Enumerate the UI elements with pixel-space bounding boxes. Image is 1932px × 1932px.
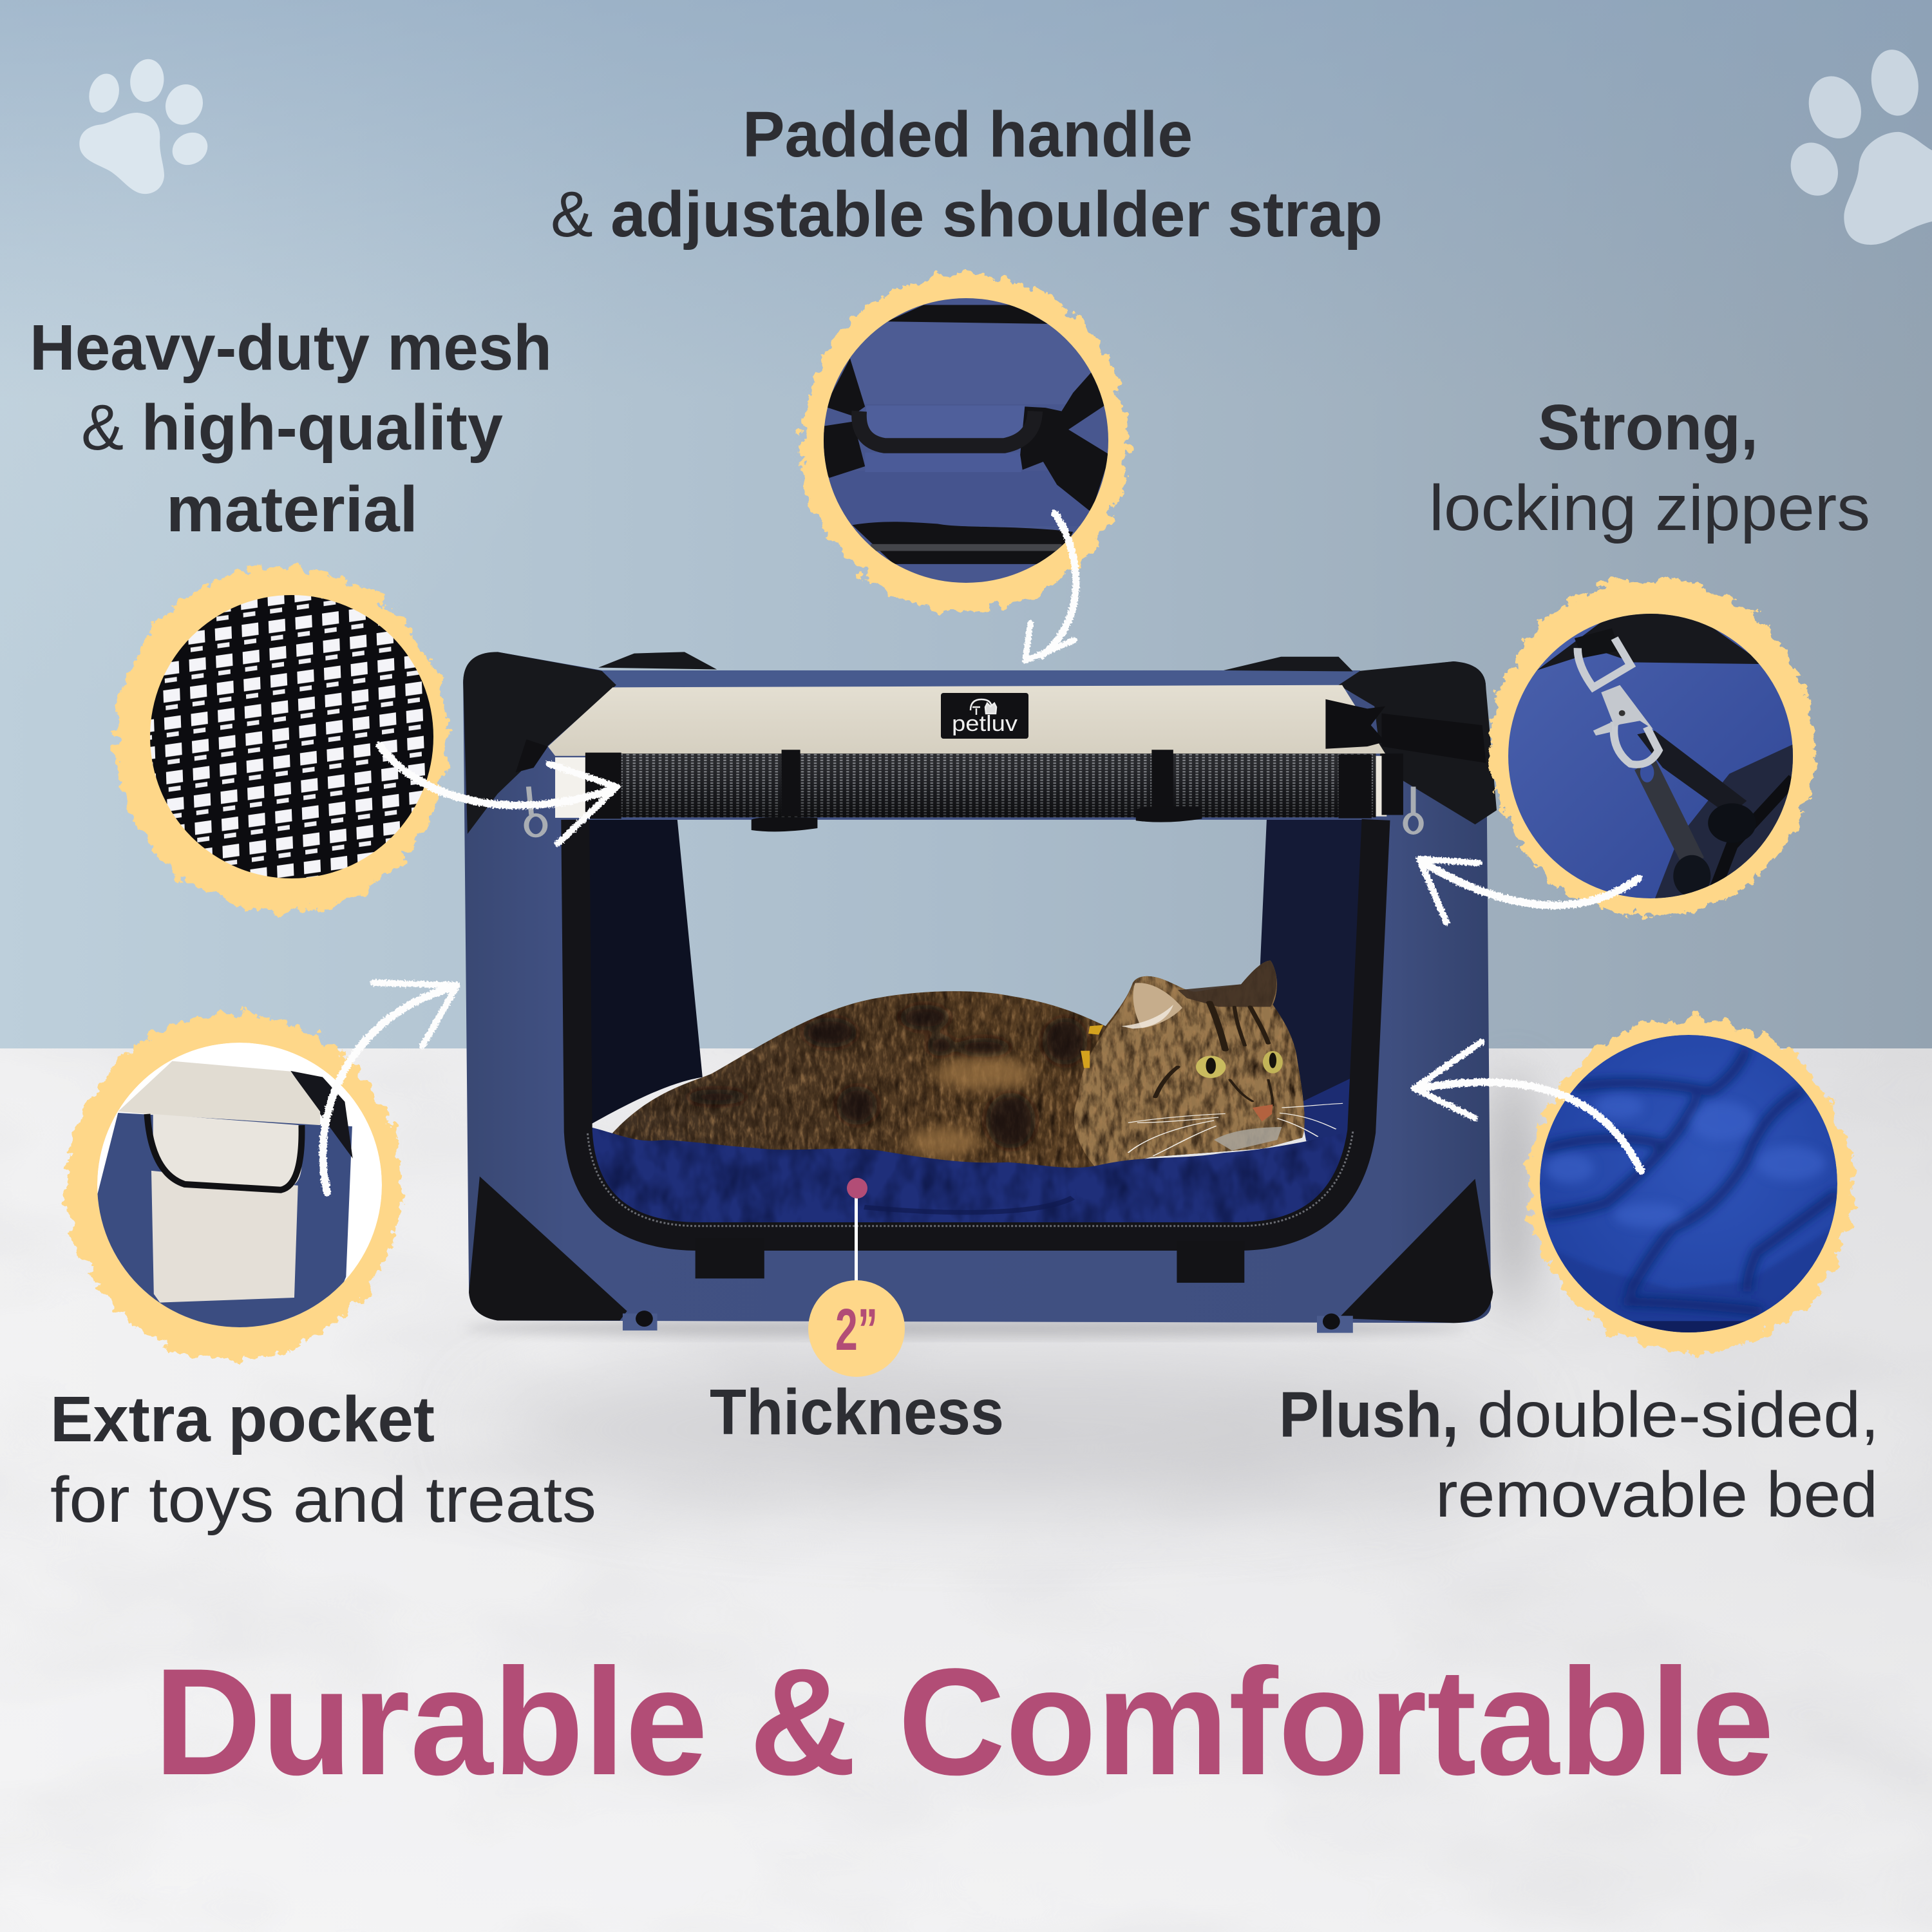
callout: mesh photo <box>115 567 448 912</box>
crate: silver clasps <box>526 786 1421 836</box>
callout: pocket photo <box>66 1014 401 1359</box>
crate: fabric shell <box>463 652 1497 1333</box>
arrow: to pocket side <box>323 983 457 1193</box>
arrow: to top handle <box>1025 513 1076 661</box>
icon: left paw print <box>79 57 214 194</box>
cat: coat blotches <box>685 1005 1088 1157</box>
circular plush bed close-up <box>1540 1035 1846 1343</box>
crate: petluv logo: petluv <box>952 712 1018 736</box>
callout: 2 inch thickness pin <box>808 1178 905 1377</box>
cat <box>609 961 1343 1172</box>
cat: whiskers <box>1128 1103 1343 1156</box>
heading: padded handle <box>551 99 1383 251</box>
badge value: 2” <box>835 1297 878 1363</box>
rough yellow ring <box>1490 578 1815 916</box>
heading: zippers <box>1429 392 1870 544</box>
cat: head and chest <box>1074 961 1305 1169</box>
crate: side buckle <box>1325 699 1486 763</box>
crate: beige roof panel <box>548 685 1385 756</box>
crate: feet <box>623 1311 1353 1333</box>
cat: fur body <box>609 961 1305 1172</box>
pin dot <box>847 1178 867 1198</box>
arrow: to mesh <box>380 746 617 844</box>
rough yellow ring <box>66 1014 401 1359</box>
callout: handle photo <box>801 274 1128 611</box>
yellow badge <box>808 1280 905 1377</box>
heading: mesh: material <box>166 473 418 545</box>
heading: zippers: Strong, <box>1538 392 1758 464</box>
crate: petluv logo <box>941 693 1028 739</box>
heading: mesh: Heavy-duty mesh <box>30 312 552 384</box>
heading: plush bed: removable bed <box>1435 1459 1878 1531</box>
background wall <box>0 0 1932 1050</box>
callout: bed photo <box>1528 1018 1853 1353</box>
cat: nose and muzzle <box>1214 1104 1282 1151</box>
cat: eyes <box>1196 1051 1283 1078</box>
circular zipper close-up <box>1502 611 1799 902</box>
rough yellow ring <box>115 567 448 912</box>
crate with cat <box>463 652 1497 1333</box>
heading: extra pocket <box>50 1383 596 1536</box>
heading: plush bed: double-sided, <box>1477 1379 1879 1451</box>
icon: right paw print <box>1782 46 1932 245</box>
rough yellow ring <box>801 274 1128 611</box>
heading: mesh <box>30 312 552 545</box>
heading: mesh: & high-quality <box>81 392 503 464</box>
cat: forehead and ear markings <box>1178 961 1276 1007</box>
heading: padded handle: & adjustable shoulder strap <box>551 178 1383 251</box>
crate: plush bed <box>580 1124 1360 1240</box>
heading: padded handle: Padded handle <box>743 99 1193 171</box>
crate: velcro tabs <box>696 1238 1244 1283</box>
heading: plush bed: Plush, <box>1279 1379 1459 1451</box>
circular mesh close-up <box>150 595 433 878</box>
circular pocket close-up <box>91 1043 382 1333</box>
crate: dark interior side panels <box>575 820 1376 1141</box>
crate: black bottom corners <box>469 1177 1493 1323</box>
heading: zippers: locking zippers <box>1429 472 1870 544</box>
label: thickness: Thickness <box>710 1376 1004 1448</box>
cat: yellow collar <box>1081 1025 1103 1068</box>
heading: plush bed <box>1279 1379 1879 1531</box>
crate: zipper border <box>575 820 1376 1236</box>
pin line <box>855 1198 858 1285</box>
crate: top navy strip <box>598 670 1360 692</box>
rough yellow ring <box>1528 1018 1853 1353</box>
title: Durable & Comfortable <box>154 1637 1774 1807</box>
callout: zipper photo <box>1490 578 1815 916</box>
heading: extra pocket: for toys and treats <box>50 1464 596 1536</box>
crate: white edges of rolled flap <box>555 757 598 818</box>
crate: rolled mesh flap <box>585 753 1376 817</box>
circular handle close-up <box>822 296 1110 583</box>
crate: straps and end caps <box>516 739 1403 831</box>
arrow: to zipper <box>1419 859 1638 922</box>
heading: extra pocket: Extra pocket <box>50 1383 435 1455</box>
marble floor <box>0 1048 1932 1932</box>
arrow: to bed <box>1414 1042 1641 1171</box>
crate: black top corners <box>463 652 1497 834</box>
